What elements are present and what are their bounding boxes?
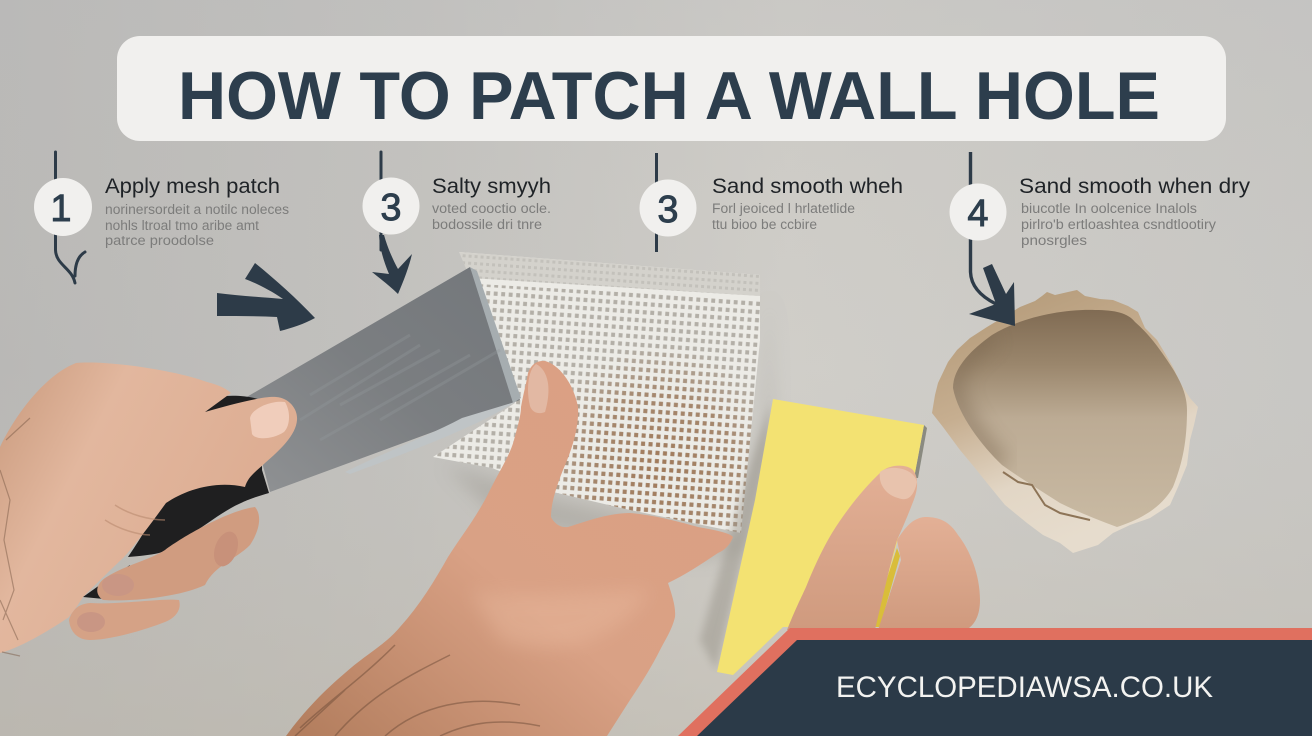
left palm and thumb	[0, 362, 297, 653]
mesh patch	[433, 252, 760, 533]
left thumbnail	[250, 402, 289, 438]
knuckle highlight	[470, 590, 650, 648]
step 2 number badge	[362, 178, 420, 234]
interior edge shadow	[953, 335, 1002, 465]
big arrow into hole	[969, 264, 1015, 326]
step 2	[362, 152, 551, 294]
wrist hair	[0, 418, 30, 656]
step 2 description: bodossile dri tnre	[432, 217, 542, 232]
step 4 description: pnosrgles	[1021, 233, 1087, 248]
scraper and left hand	[0, 267, 521, 656]
step 4 description: biucotle In oolcenice Inalols	[1021, 201, 1197, 216]
centre hand	[286, 361, 733, 736]
step 3	[640, 153, 903, 252]
step 3 description	[712, 201, 855, 232]
mesh shadow	[445, 290, 775, 560]
wall hole	[932, 290, 1198, 553]
step 1 connector	[56, 152, 85, 283]
step 2 description: voted cooctio ocle.	[432, 201, 551, 216]
left little finger	[69, 600, 180, 640]
crumbled gypsum crack	[1003, 472, 1090, 520]
footer banner	[678, 628, 1312, 736]
step 3 number badge	[640, 180, 696, 236]
step 1 number badge	[34, 178, 92, 236]
knuckle creases	[105, 505, 165, 535]
step 3 number badge: 3	[657, 189, 679, 231]
step 4 heading: Sand smooth when dry	[1019, 174, 1250, 198]
step 2 number badge: 3	[380, 187, 402, 229]
title banner: HOW TO PATCH A WALL HOLE	[178, 58, 1160, 134]
scraper blade	[245, 267, 521, 492]
step 2 heading: Salty smyyh	[432, 174, 551, 198]
thumbnail	[528, 364, 548, 413]
step 4	[950, 152, 1250, 304]
step 1 number badge: 1	[50, 188, 72, 230]
step 1 description	[105, 202, 289, 248]
step 4 connector	[970, 152, 996, 304]
step 2 description	[432, 201, 551, 232]
step 1 description: nohls ltroal tmo aribe amt	[105, 218, 259, 233]
step 1 heading: Apply mesh patch	[105, 174, 280, 198]
index finger	[787, 466, 917, 630]
footer banner: ECYCLOPEDIAWSA.CO.UK	[836, 671, 1213, 704]
big pointing arrow	[217, 263, 315, 331]
scraper handle	[83, 396, 269, 600]
arm hair	[295, 645, 540, 736]
second finger	[878, 517, 980, 630]
step 1 description: patrce proodolse	[105, 233, 214, 248]
step 1	[34, 152, 289, 283]
step 3 description: ttu bioo be ccbire	[712, 217, 817, 232]
step 1 description: norinersordeit a notilc noleces	[105, 202, 289, 217]
right hand	[787, 466, 980, 630]
step 4 description: pirlro'b ertloashtea csndtlootiry	[1021, 217, 1216, 232]
title banner	[117, 36, 1226, 141]
step 4 number badge: 4	[967, 193, 989, 235]
torn drywall edge	[932, 290, 1198, 553]
step 2 connector	[380, 152, 382, 250]
hole interior	[953, 310, 1187, 527]
step 2 arrow	[372, 235, 412, 294]
sanding sponge	[700, 399, 927, 675]
step 4 number badge	[950, 184, 1006, 240]
step 3 description: Forl jeoiced l hrlatetlide	[712, 201, 855, 216]
step 3 connector	[655, 153, 658, 252]
step 4 description	[1021, 201, 1216, 248]
fingernail	[880, 468, 917, 499]
step 3 heading: Sand smooth wheh	[712, 174, 903, 198]
left middle finger	[97, 507, 259, 600]
